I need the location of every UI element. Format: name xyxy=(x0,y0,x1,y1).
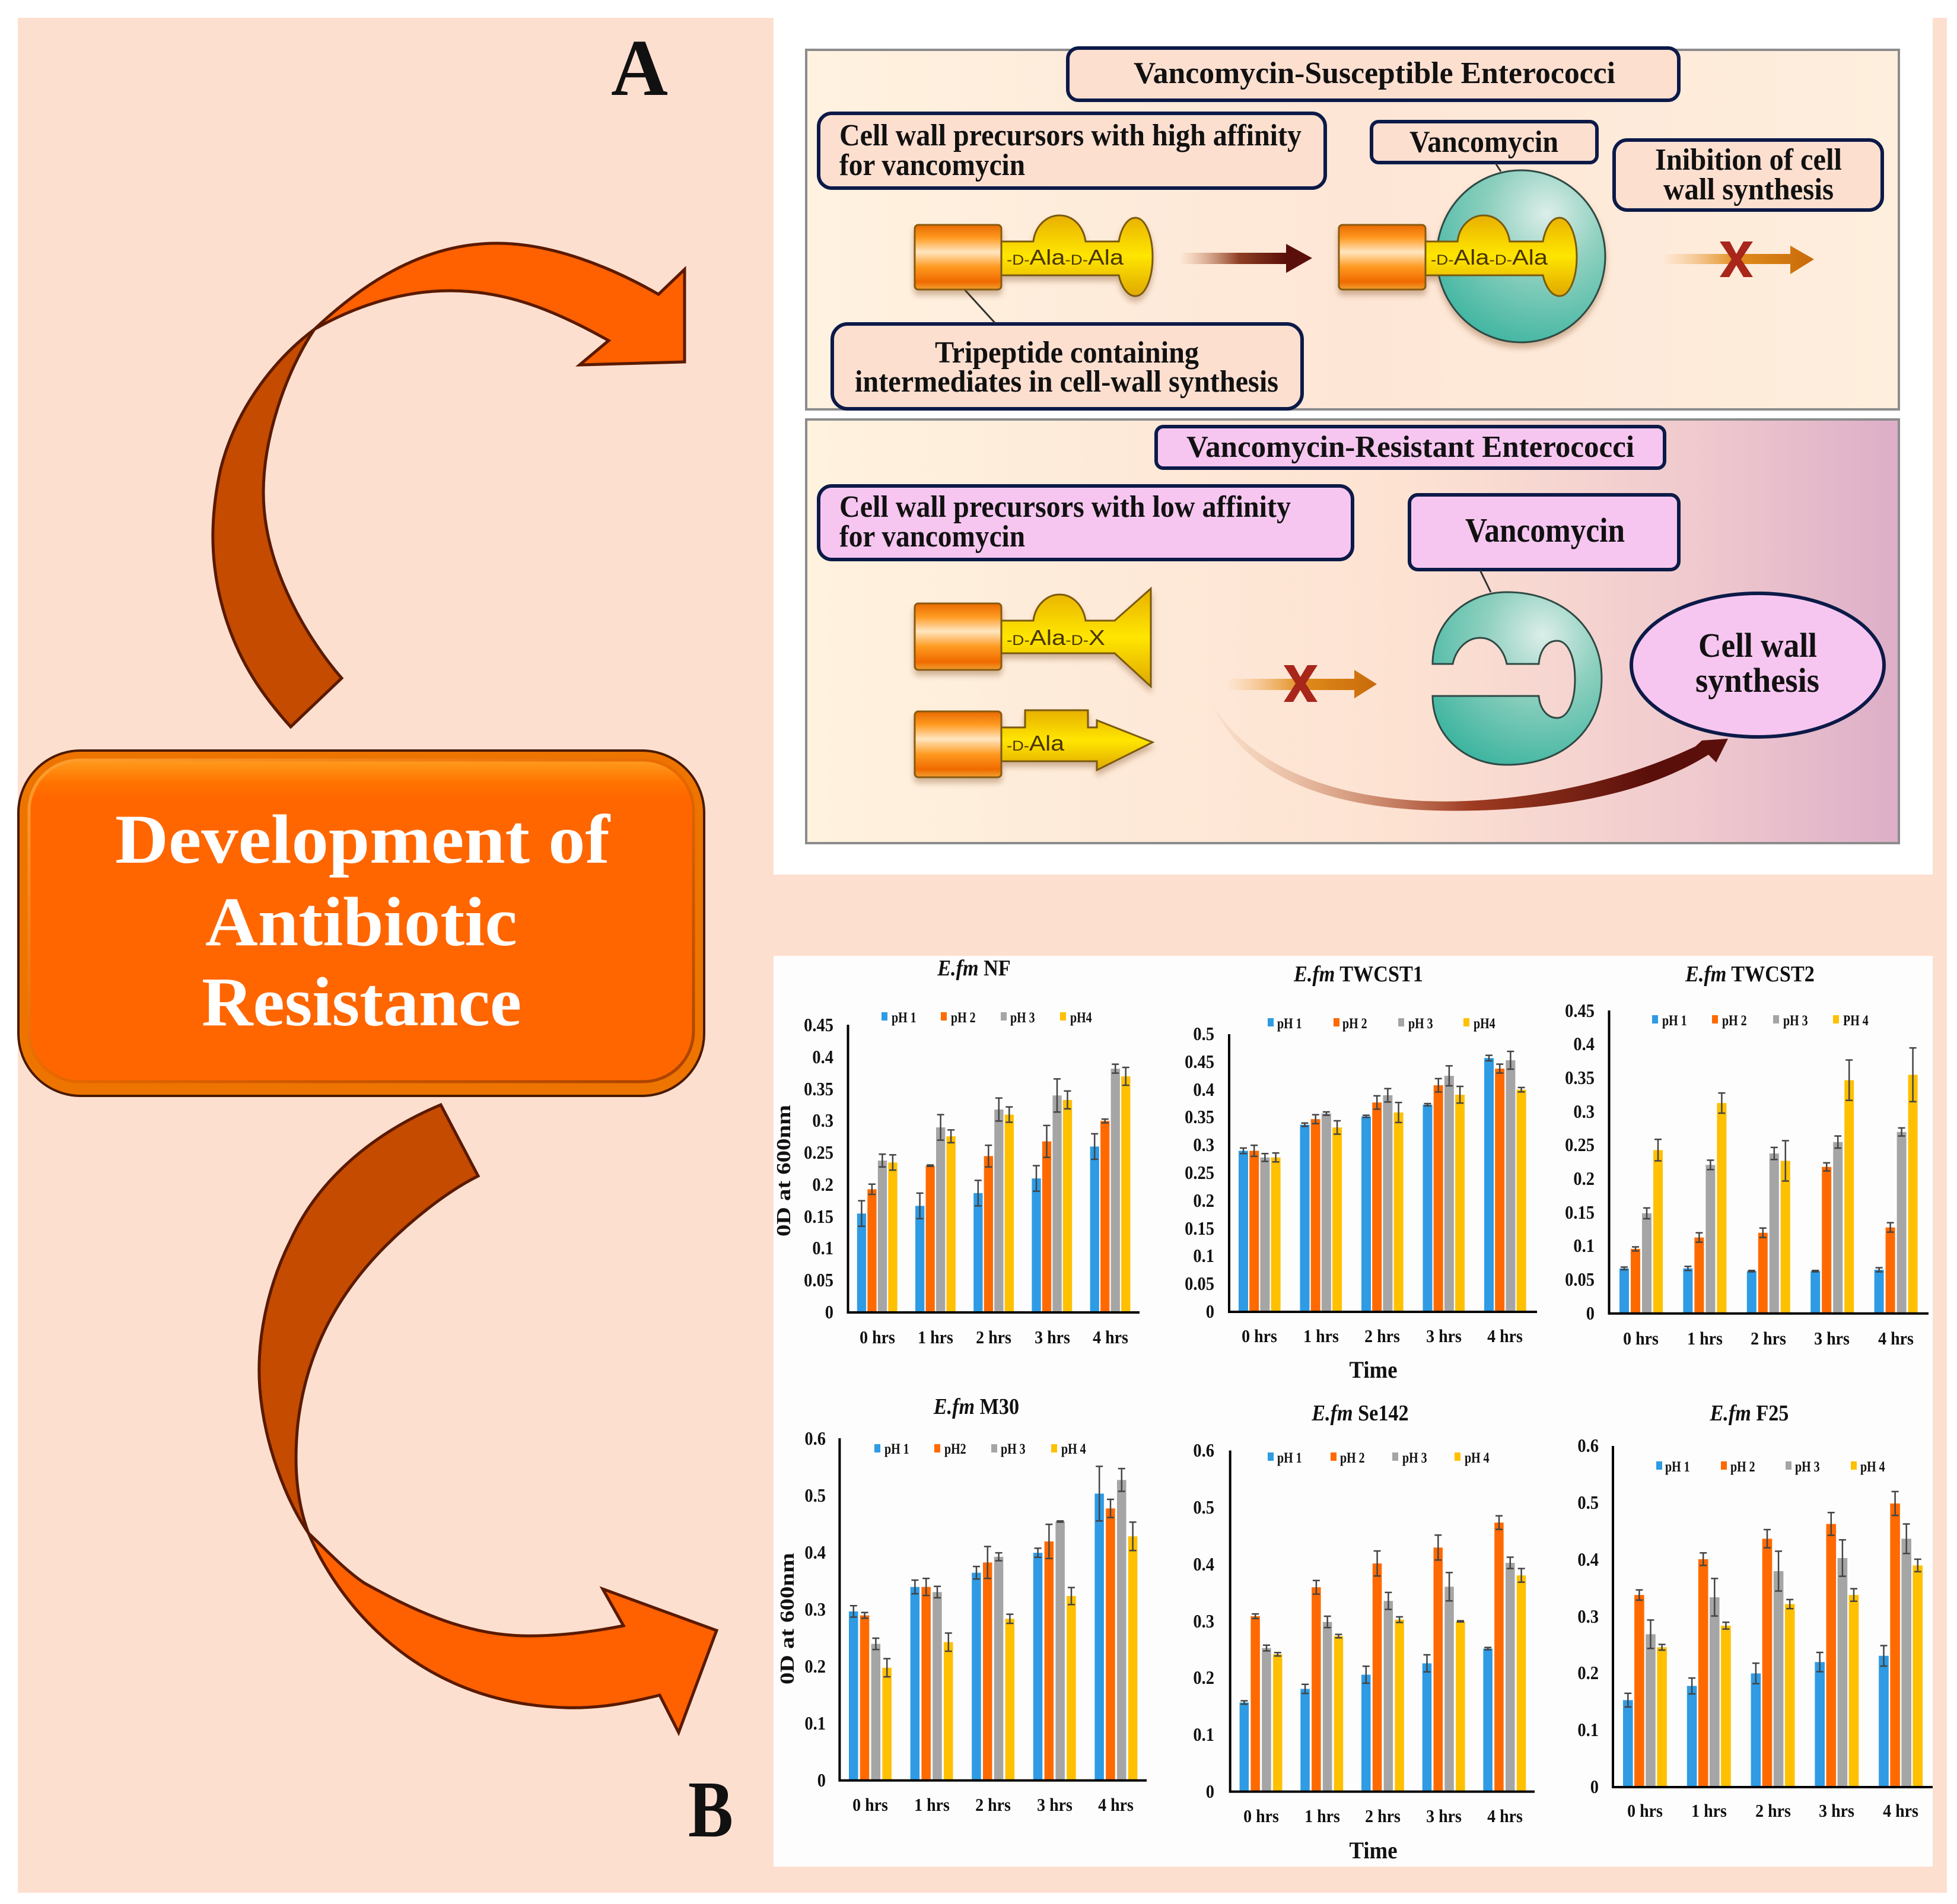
y axis values: 0.25 xyxy=(804,1142,833,1163)
y axis values: 0.35 xyxy=(1185,1106,1214,1127)
y axis values: 0.25 xyxy=(1565,1134,1595,1155)
y axis values: 0.3 xyxy=(1577,1606,1599,1627)
legend: pH 1 xyxy=(884,1441,909,1457)
chart: E.fm TWCST1 xyxy=(1185,961,1537,1383)
bars and error bars xyxy=(1619,1048,1918,1314)
x axis values: 3 hrs xyxy=(1819,1801,1854,1821)
y axis values xyxy=(804,1428,826,1791)
x axis values xyxy=(1627,1801,1918,1821)
axes xyxy=(1609,1010,1929,1314)
molecule: D-Ala xyxy=(915,710,1153,777)
chart title: E.fm NF xyxy=(937,955,1011,980)
icon: vancomycin open xyxy=(1433,592,1602,765)
x axis values: 4 hrs xyxy=(1098,1795,1134,1815)
legend: pH4 xyxy=(1474,1015,1495,1032)
x axis values: 0 hrs xyxy=(1242,1327,1277,1346)
heading: susceptible xyxy=(1068,48,1679,100)
y axis values: 0 xyxy=(1206,1781,1214,1802)
bars and error bars xyxy=(1623,1492,1923,1787)
x axis values: 2 hrs xyxy=(1364,1327,1400,1346)
y axis values: 0.4 xyxy=(1193,1079,1214,1100)
y axis values: 0.5 xyxy=(1193,1496,1214,1518)
x axis values: 0 hrs xyxy=(1623,1329,1659,1349)
legend xyxy=(1268,1015,1495,1032)
x axis values: 2 hrs xyxy=(975,1795,1011,1815)
x axis values: 3 hrs xyxy=(1426,1327,1462,1346)
x axis values: 2 hrs xyxy=(1365,1807,1401,1826)
y axis values: 0.15 xyxy=(1565,1201,1595,1223)
y axis values: 0.2 xyxy=(1577,1662,1599,1683)
label: vancomycin: Vancomycin xyxy=(1465,511,1625,549)
central box: development of antibiotic resistance: Development of xyxy=(115,800,611,878)
central box: development of antibiotic resistance xyxy=(18,751,704,1096)
y axis values: 0.4 xyxy=(812,1046,833,1067)
legend xyxy=(882,1009,1092,1026)
label: high affinity precursors xyxy=(819,113,1325,188)
label: vancomycin xyxy=(1409,495,1679,570)
y axis values xyxy=(1565,1000,1595,1324)
label: tripeptide intermediates: Tripeptide containing xyxy=(935,336,1199,370)
x axis values: 4 hrs xyxy=(1093,1328,1128,1347)
y axis values: 0.3 xyxy=(1193,1610,1214,1632)
legend xyxy=(1652,1012,1869,1029)
x axis values xyxy=(1243,1807,1523,1826)
arrow: blocked synthesis xyxy=(1661,241,1814,277)
arrow: blocked binding xyxy=(1226,665,1377,702)
y axis values: 0.3 xyxy=(804,1598,826,1620)
y axis values: 0.6 xyxy=(1577,1435,1599,1456)
x axis values: 1 hrs xyxy=(1687,1329,1723,1349)
y axis values: 0.6 xyxy=(1193,1439,1214,1461)
x axis values: 4 hrs xyxy=(1487,1327,1523,1346)
y axis values xyxy=(1193,1439,1214,1802)
x axis values: 3 hrs xyxy=(1035,1328,1070,1347)
chart: E.fm TWCST2 xyxy=(1565,961,1929,1349)
y axis values: 0.05 xyxy=(1185,1273,1214,1294)
chart title: E.fm M30 xyxy=(933,1394,1019,1419)
y axis values: 0 xyxy=(1586,1302,1595,1324)
label: A: A xyxy=(611,24,668,113)
legend xyxy=(1268,1450,1490,1466)
chart: E.fm Se142 xyxy=(1193,1400,1535,1864)
label: low affinity precursors: Cell wall precursors with low affinity xyxy=(839,490,1291,524)
y axis values: 0.45 xyxy=(1565,1000,1595,1021)
y axis title: 0D at 600nm xyxy=(773,1105,795,1237)
leader lines xyxy=(964,163,1501,323)
y axis values: 0.3 xyxy=(1573,1101,1595,1122)
central box: development of antibiotic resistance: Resistance xyxy=(202,963,521,1041)
legend: pH 1 xyxy=(1277,1450,1302,1466)
y axis values: 0.3 xyxy=(812,1110,833,1131)
x axis values xyxy=(860,1328,1128,1347)
x axis title: Time xyxy=(1349,1358,1398,1383)
legend: pH 2 xyxy=(951,1009,976,1026)
x axis values: 0 hrs xyxy=(1243,1807,1279,1826)
x axis values xyxy=(1623,1329,1914,1349)
y axis title: 0D at 600nm xyxy=(777,1553,798,1684)
legend: pH 1 xyxy=(892,1009,917,1026)
y axis values: 0.35 xyxy=(804,1078,833,1099)
label: inhibition of cell wall synthesis: wall synthesis xyxy=(1663,173,1834,206)
label: inhibition of cell wall synthesis: Inibition of cell xyxy=(1655,143,1842,177)
label: cell wall synthesis: synthesis xyxy=(1695,661,1819,700)
x axis values: 3 hrs xyxy=(1037,1795,1073,1815)
label: tripeptide intermediates: intermediates in cell-wall synthesis xyxy=(855,365,1278,399)
y axis values: 0 xyxy=(1590,1776,1599,1797)
chart: E.fm F25 xyxy=(1577,1400,1933,1821)
y axis values: 0.05 xyxy=(1565,1269,1595,1290)
legend: pH 2 xyxy=(1730,1458,1755,1475)
x axis values: 1 hrs xyxy=(1691,1801,1727,1821)
label: inhibition of cell wall synthesis xyxy=(1614,140,1882,210)
chart title: E.fm F25 xyxy=(1710,1400,1789,1425)
legend: pH 3 xyxy=(1402,1450,1427,1466)
x axis values: 1 hrs xyxy=(918,1328,953,1347)
bars and error bars xyxy=(1239,1051,1526,1312)
x axis values: 2 hrs xyxy=(1755,1801,1791,1821)
x axis values: 3 hrs xyxy=(1814,1329,1850,1349)
y axis values xyxy=(804,1014,833,1323)
y axis values: 0.4 xyxy=(1573,1033,1595,1054)
y axis values: 0.2 xyxy=(1573,1168,1595,1189)
x axis title: Time xyxy=(1349,1838,1398,1864)
y axis values: 0.1 xyxy=(812,1237,833,1258)
y axis values: 0.45 xyxy=(1185,1051,1214,1072)
axes xyxy=(1230,1451,1535,1792)
legend xyxy=(874,1441,1086,1457)
label: high affinity precursors: Cell wall precursors with high affinity xyxy=(839,119,1302,152)
label: low affinity precursors xyxy=(819,486,1353,560)
y axis values: 0.5 xyxy=(1577,1492,1599,1513)
panel: vancomycin-resistant enterococci xyxy=(806,419,1899,843)
legend: pH 2 xyxy=(1722,1012,1747,1029)
y axis values xyxy=(1577,1435,1599,1797)
x axis values: 0 hrs xyxy=(1627,1801,1663,1821)
y axis values: 0.35 xyxy=(1565,1067,1595,1088)
central box: development of antibiotic resistance: Antibiotic xyxy=(205,883,517,961)
chart title: E.fm TWCST1 xyxy=(1293,961,1423,986)
y axis values: 0.1 xyxy=(1577,1719,1599,1740)
x axis values: 4 hrs xyxy=(1487,1807,1523,1826)
panel A: vancomycin mechanism xyxy=(774,18,1933,875)
molecule: D-Ala-D-Ala precursor: -D-Ala -D-Ala xyxy=(1007,245,1124,269)
bars and error bars xyxy=(1240,1516,1526,1792)
legend: pH2 xyxy=(944,1441,966,1457)
legend: pH 3 xyxy=(1010,1009,1035,1026)
x axis values xyxy=(852,1795,1134,1815)
y axis values: 0.2 xyxy=(1193,1667,1214,1688)
leader line xyxy=(1480,570,1491,592)
y axis values: 0.05 xyxy=(804,1269,833,1290)
bound molecule: -D-Ala -D-Ala xyxy=(1431,245,1548,269)
y axis values: 0 xyxy=(1206,1301,1214,1322)
axes xyxy=(1229,1034,1537,1312)
x axis values: 4 hrs xyxy=(1878,1329,1914,1349)
y axis values: 0.2 xyxy=(804,1655,826,1677)
panel B: bar charts xyxy=(773,955,1933,1867)
x axis values: 2 hrs xyxy=(976,1328,1011,1347)
y axis values: 0.25 xyxy=(1185,1162,1214,1183)
y axis values: 0 xyxy=(817,1769,826,1791)
arrow: up to panel A xyxy=(213,243,685,727)
label: tripeptide intermediates xyxy=(832,324,1302,409)
label: cell wall synthesis: Cell wall xyxy=(1698,626,1817,665)
legend: pH4 xyxy=(1070,1009,1092,1026)
chart: E.fm M30 xyxy=(777,1394,1147,1815)
legend: pH 3 xyxy=(1001,1441,1026,1457)
y axis values: 0.15 xyxy=(804,1206,833,1227)
y axis values: 0.1 xyxy=(804,1712,826,1734)
molecule: D-Ala-D-X: -D-Ala -D-X xyxy=(1007,625,1105,650)
x axis values xyxy=(1242,1327,1523,1346)
axes xyxy=(1613,1446,1933,1787)
heading: susceptible: Vancomycin-Susceptible Enterococci xyxy=(1134,56,1615,90)
arrow: binding xyxy=(1179,244,1312,273)
x axis values: 1 hrs xyxy=(914,1795,950,1815)
y axis values: 0.2 xyxy=(1193,1190,1214,1211)
heading: resistant: Vancomycin-Resistant Enterococci xyxy=(1186,430,1634,464)
legend: pH 3 xyxy=(1408,1015,1433,1032)
legend: pH 2 xyxy=(1340,1450,1365,1466)
x axis values: 4 hrs xyxy=(1883,1801,1918,1821)
arrow: curved to cell wall synthesis xyxy=(1212,704,1728,811)
chart: E.fm NF xyxy=(773,955,1140,1347)
legend: pH 1 xyxy=(1662,1012,1687,1029)
x axis values: 2 hrs xyxy=(1751,1329,1786,1349)
legend: pH 4 xyxy=(1465,1450,1490,1466)
x axis values: 1 hrs xyxy=(1303,1327,1339,1346)
y axis values: 0.4 xyxy=(1193,1553,1214,1575)
bound molecule xyxy=(1339,215,1577,296)
label: cell wall synthesis xyxy=(1631,593,1884,737)
legend: pH 4 xyxy=(1860,1458,1885,1475)
y axis values: 0.4 xyxy=(1577,1549,1599,1570)
panel: vancomycin-susceptible enterococci xyxy=(806,48,1899,409)
y axis values: 0.6 xyxy=(804,1428,826,1449)
bars and error bars xyxy=(849,1466,1137,1781)
y axis values xyxy=(1185,1023,1214,1322)
legend: pH 1 xyxy=(1277,1015,1302,1032)
molecule: D-Ala-D-Ala precursor xyxy=(915,215,1153,296)
y axis values: 0 xyxy=(825,1301,833,1323)
label: high affinity precursors: for vancomycin xyxy=(839,148,1025,182)
x axis values: 0 hrs xyxy=(860,1328,895,1347)
chart title: E.fm Se142 xyxy=(1311,1400,1409,1425)
vancomycin bound to precursor xyxy=(1339,170,1605,342)
legend: pH 4 xyxy=(1061,1441,1086,1457)
x axis values: 3 hrs xyxy=(1426,1807,1462,1826)
legend: pH 1 xyxy=(1665,1458,1690,1475)
x axis values: 1 hrs xyxy=(1304,1807,1340,1826)
molecule: D-Ala: -D-Ala xyxy=(1007,731,1065,755)
y axis values: 0.3 xyxy=(1193,1134,1214,1155)
legend: pH 3 xyxy=(1795,1458,1820,1475)
icon: vancomycin oval xyxy=(1437,170,1605,342)
y axis values: 0.5 xyxy=(1193,1023,1214,1044)
y axis values: 0.2 xyxy=(812,1174,833,1195)
legend xyxy=(1656,1458,1885,1475)
label: B: B xyxy=(688,1765,733,1854)
legend: pH 2 xyxy=(1342,1015,1367,1032)
y axis values: 0.1 xyxy=(1193,1245,1214,1266)
label: vancomycin xyxy=(1372,122,1597,163)
axes xyxy=(848,1025,1140,1312)
y axis values: 0.45 xyxy=(804,1014,833,1035)
bars and error bars xyxy=(857,1064,1130,1312)
chart title: E.fm TWCST2 xyxy=(1685,961,1815,986)
legend: PH 4 xyxy=(1843,1012,1869,1029)
x axis values: 0 hrs xyxy=(852,1795,888,1815)
legend: pH 3 xyxy=(1783,1012,1808,1029)
y axis values: 0.1 xyxy=(1573,1235,1595,1256)
arrow: down to panel B xyxy=(259,1105,717,1733)
axes xyxy=(839,1438,1147,1781)
molecule: D-Ala-D-X xyxy=(915,589,1151,686)
y axis values: 0.1 xyxy=(1193,1724,1214,1745)
label: vancomycin: Vancomycin xyxy=(1409,125,1558,159)
y axis values: 0.5 xyxy=(804,1485,826,1506)
label: low affinity precursors: for vancomycin xyxy=(839,520,1025,554)
y axis values: 0.4 xyxy=(804,1541,826,1563)
y axis values: 0.15 xyxy=(1185,1218,1214,1239)
